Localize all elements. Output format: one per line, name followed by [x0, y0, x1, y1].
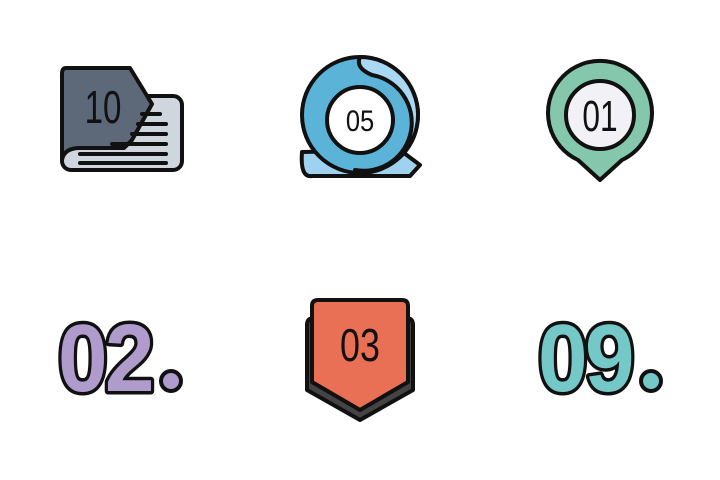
icon: circular 05: [302, 57, 420, 176]
icon: pin 01: [548, 61, 652, 180]
icon: number 02.: 02: [58, 304, 152, 412]
icon: pin 01: 01: [582, 92, 618, 141]
icon: circular 05: 05: [346, 104, 374, 137]
icon: badge 03: [307, 300, 413, 420]
icon: number 09.: 09: [538, 304, 632, 412]
icon: badge 03: 03: [340, 320, 380, 371]
icon: document 10: 10: [85, 83, 121, 133]
icon: document 10: [62, 68, 182, 170]
